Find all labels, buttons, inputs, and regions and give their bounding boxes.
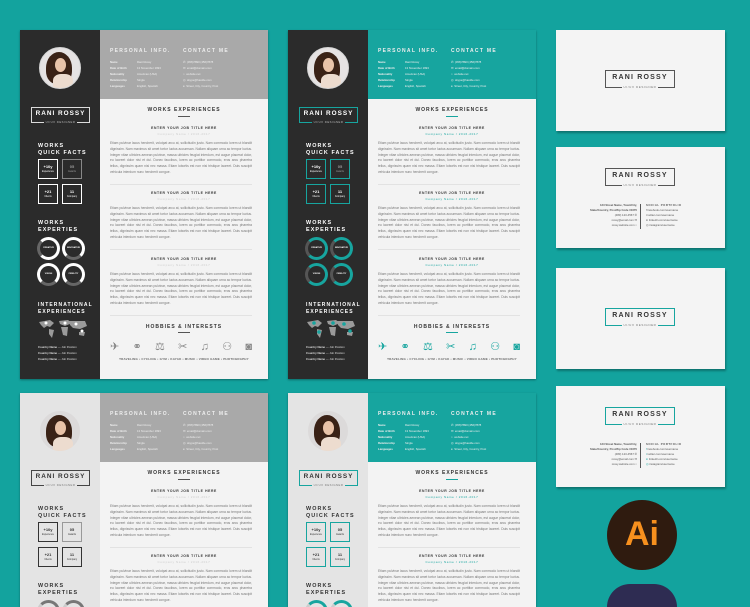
expertise rings: FIDELITY [69,273,78,275]
job entry 3: Company Name / 2016-2017 [426,263,478,267]
heading: works quick facts: WORKS [306,506,332,512]
resume: dark sidebar, teal header (top-right) [288,30,536,379]
card address & contacts: State/Country, Post/Zip Code #1670 [590,447,637,451]
hobby labels: TRAVELING • CYCLING • GYM • KAYAK • MUSIC • VIDEO GAME • PHOTOGRAPHY [387,357,517,361]
quick facts boxes [306,522,350,567]
job entry 2: Company Name / 2016-2017 [426,560,478,564]
quick facts boxes: 05 [70,164,74,169]
contact list: ✆ (456)7890 (456)7878 [183,423,213,427]
hobby icons: ◙ [245,341,252,353]
resume: dark sidebar, teal header (top-right): 13 November 1993 [405,66,429,70]
card name box [605,308,675,326]
hobby icons: ♫ [201,341,209,353]
heading: works experties: EXPERTIES [306,590,346,596]
contact list: ● Street, City, Country, Post [183,447,218,451]
personal info list: Date of Birth [378,66,395,70]
contact list [183,423,218,451]
quick facts boxes: +21 [313,552,319,557]
hobby icons: ⚭ [400,341,410,353]
expertise rings: VISION [45,273,52,275]
card social portfolio [646,442,721,467]
heading: works quick facts: WORKS [306,143,332,149]
resume: dark sidebar, teal header (top-right): Rani Rossy [405,60,419,64]
quick facts boxes: Company [335,558,345,561]
personal info list: Name [110,60,118,64]
quick facts boxes: +10y [43,527,52,532]
resume: dark sidebar, teal header (top-right): American (USA) [405,72,425,76]
job entry 1: Etiam pulvinar lacus hendrerit, volutpat arcu at, sollicitudin justo. Nam commodo lorem ut blandit dignissim. Nam maximus sit amet tortor luctus accumsan. Nullam aliquam urna ac tempor luctus. Integer vitae ultricies aenean pulvinar, massa ultricies feugiat interdum, est augue placerat dolor, eu laoreet dolor nisi et dui. Donec faucibus, lorem ac porttitor commodo, eros arcu pharetra tellus, dignissim quam nisi nec massa. Etiam lobortis est non nisi tristique laoreet. Duis suscipit vehicula interdum nunc hendrerit congue. [110,504,252,537]
contact list: ✉ email@domain.com [451,429,480,433]
personal info list: Date of Birth [110,429,127,433]
heading: works quick facts: QUICK FACTS [306,512,355,518]
card name box [605,407,675,425]
quick facts boxes [38,522,82,567]
resume: light sidebar, teal header (bottom-right) [288,393,536,607]
resume: dark sidebar, gray header (top-left): American (USA) [137,72,157,76]
contact list [183,60,218,88]
job entry 1: Etiam pulvinar lacus hendrerit, volutpat arcu at, sollicitudin justo. Nam commodo lorem ut blandit dignissim. Nam maximus sit amet tortor luctus accumsan. Nullam aliquam urna ac tempor luctus. Integer vitae ultricies aenean pulvinar, massa ultricies feugiat interdum, est augue placerat dolor, eu laoreet dolor nisi et dui. Donec faucibus, lorem ac porttitor commodo, eros arcu pharetra tellus, dignissim quam nisi nec massa. Etiam lobortis est non nisi tristique laoreet. Duis suscipit vehicula interdum nunc hendrerit congue. [378,141,520,174]
expertise rings [306,600,352,607]
personal info list: Relationship [378,441,395,445]
name box: RANI ROSSY [36,110,85,117]
job entry 1: ENTER YOUR JOB TITLE HERE [419,489,485,493]
name box: UI/UX DESIGNER [46,483,75,487]
heading: works quick facts: QUICK FACTS [38,150,87,156]
job entry 2 [378,191,520,239]
contact list: ◎ skype@handle.com [451,78,480,82]
job entry 3: ENTER YOUR JOB TITLE HERE [419,257,485,261]
personal info list: Languages [378,447,393,451]
job entry 3 [378,257,520,305]
quick facts boxes: 05 [70,527,74,532]
name box: RANI ROSSY [304,473,353,480]
card social portfolio [646,203,721,228]
heading: works experiences: WORKS EXPERIENCES [147,107,221,113]
hobby labels: TRAVELING • CYCLING • GYM • KAYAK • MUSIC • VIDEO GAME • PHOTOGRAPHY [119,357,249,361]
name box [299,470,358,486]
icon: Adobe Illustrator badge: Ai [625,515,659,553]
card address & contacts: 123 Street Name, Town/City, [600,203,637,207]
heading: personal info: PERSONAL INFO. [110,411,171,417]
heading: hobbies & interests: HOBBIES & INTERESTS [414,324,490,330]
card social portfolio: f facebook.com/username [646,447,678,451]
hobby icons: ♫ [469,341,477,353]
personal info list: Date of Birth [378,429,395,433]
card social portfolio: in linkedin.com/username [646,218,678,222]
expertise rings: VISION [313,273,320,275]
job entry 3 [110,257,252,305]
heading: international experiences: EXPERIENCES [38,308,86,314]
job entry 1: ENTER YOUR JOB TITLE HERE [151,489,217,493]
card address & contacts: 123 Street Name, Town/City, [600,442,637,446]
heading: works experties: EXPERTIES [306,226,346,232]
resume: light sidebar, teal header (bottom-right): Rani Rossy [405,423,419,427]
card name box: RANI ROSSY [612,411,668,418]
contact list: ◎ skype@handle.com [183,78,212,82]
personal info list: Name [110,423,118,427]
heading: works experties: EXPERTIES [38,590,78,596]
heading: works quick facts [306,506,355,518]
hobby icons: ◙ [513,341,520,353]
resume: dark sidebar, teal header (top-right): Single [405,78,413,82]
hobby icons: ⚖ [155,341,165,353]
contact list: ✉ email@domain.com [183,429,212,433]
resume: dark sidebar, teal header (top-right): English, Spanish [405,84,426,88]
heading: international experiences [306,302,361,314]
job entry 2: Etiam pulvinar lacus hendrerit, volutpat arcu at, sollicitudin justo. Nam commodo lorem ut blandit dignissim. Nam maximus sit amet tortor luctus accumsan. Nullam aliquam urna ac tempor luctus. Integer vitae ultricies aenean pulvinar, massa ultricies feugiat interdum, est augue placerat dolor, eu laoreet dolor nisi et dui. Donec faucibus, lorem ac porttitor commodo, eros arcu pharetra tellus, dignissim quam nisi nec massa. Etiam lobortis est non nisi tristique laoreet. Duis suscipit vehicula interdum nunc hendrerit congue. [110,206,252,239]
card address & contacts [564,203,637,228]
card social portfolio: ◎ instagram/username [646,223,675,227]
heading: works experties [306,220,346,232]
contact list: ◎ skype@handle.com [183,441,212,445]
card name box: RANI ROSSY [612,172,668,179]
resume: light sidebar, gray header (bottom-left) [20,393,268,607]
card name box: UI/UX DESIGNER [624,183,656,187]
job entry 2: ENTER YOUR JOB TITLE HERE [419,191,485,195]
heading: works experties [38,220,78,232]
hobby icons: ✂ [178,341,187,353]
personal info list: Relationship [110,78,127,82]
quick facts boxes: Awards [336,533,344,536]
contact list: ● Street, City, Country, Post [183,84,218,88]
card address & contacts: (480) 123-4567 ✆ [615,452,637,456]
quick facts boxes: Clients [44,195,52,198]
job entry 3: Company Name / 2016-2017 [158,263,210,267]
expertise rings [38,600,84,607]
personal info list: Nationality [378,435,392,439]
personal info list: Languages [110,84,125,88]
hobby icons: ⚇ [490,341,500,353]
job entry 2 [110,554,252,602]
contact list: ✉ email@domain.com [451,66,480,70]
card name box: RANI ROSSY [612,312,668,319]
quick facts boxes: Experience [310,533,322,536]
country list: Country Name — Job Position [306,345,345,349]
hobby icons: ✈ [110,341,119,353]
quick facts boxes: 11 [338,189,342,194]
contact list: ✆ (456)7890 (456)7878 [451,60,481,64]
heading: works experiences: WORKS EXPERIENCES [147,470,221,476]
country list: Country Name — Job Position [306,351,345,355]
card address & contacts: rossy@email.com ✉ [612,457,637,461]
heading: international experiences: INTERNATIONAL [306,302,361,308]
quick facts boxes: +21 [313,189,319,194]
resume: light sidebar, teal header (bottom-right): 13 November 1993 [405,429,429,433]
name box [31,107,90,123]
card address & contacts: (480) 123-4567 ✆ [615,213,637,217]
card name box [605,70,675,88]
heading: international experiences: INTERNATIONAL [38,302,93,308]
quick facts boxes: 05 [338,527,342,532]
personal info list [378,423,395,451]
job entry 1: ENTER YOUR JOB TITLE HERE [419,126,485,130]
job entry 2: Etiam pulvinar lacus hendrerit, volutpat arcu at, sollicitudin justo. Nam commodo lorem ut blandit dignissim. Nam maximus sit amet tortor luctus accumsan. Nullam aliquam urna ac tempor luctus. Integer vitae ultricies aenean pulvinar, massa ultricies feugiat interdum, est augue placerat dolor, eu laoreet dolor nisi et dui. Donec faucibus, lorem ac porttitor commodo, eros arcu pharetra tellus, dignissim quam nisi nec massa. Etiam lobortis est non nisi tristique laoreet. Duis suscipit vehicula interdum nunc hendrerit congue. [110,569,252,602]
job entry 1: Company Name / 2016-2017 [158,495,210,499]
resume: dark sidebar, gray header (top-left) [20,30,268,379]
job entry 1: ENTER YOUR JOB TITLE HERE [151,126,217,130]
card name box: UI/UX DESIGNER [624,422,656,426]
heading: works quick facts: WORKS [38,143,64,149]
resume: dark sidebar, gray header (top-left): Single [137,78,145,82]
job entry 1: Company Name / 2016-2017 [158,132,210,136]
heading: works experties [306,583,346,596]
hobby icons [378,341,520,353]
sidebar profile photo [39,410,81,452]
heading: works quick facts: QUICK FACTS [306,150,355,156]
sidebar profile photo [307,410,349,452]
heading: works experties: WORKS [38,220,64,226]
heading: personal info: PERSONAL INFO. [110,48,171,54]
heading: works experiences: WORKS EXPERIENCES [415,470,489,476]
personal info list: Nationality [110,435,124,439]
job entry 2: Company Name / 2016-2017 [426,197,478,201]
quick facts boxes: Experience [42,170,54,173]
quick facts boxes: +21 [45,552,51,557]
resume: light sidebar, teal header (bottom-right): English, Spanish [405,447,426,451]
card address & contacts [564,442,637,467]
job entry 1 [110,489,252,537]
job entry 2: ENTER YOUR JOB TITLE HERE [151,554,217,558]
heading: works quick facts [38,506,87,518]
quick facts boxes: Experience [310,170,322,173]
quick facts boxes [38,159,82,204]
hobby icons: ⚇ [222,341,232,353]
world map [39,320,87,338]
resume: dark sidebar, gray header (top-left): English, Spanish [137,84,158,88]
quick facts boxes: Awards [68,533,76,536]
heading: contact me: CONTACT ME [183,48,229,54]
heading: hobbies & interests: HOBBIES & INTERESTS [146,324,222,330]
quick facts boxes: Clients [312,195,320,198]
card address & contacts: rossy@email.com ✉ [612,218,637,222]
country list [38,345,77,361]
name box [299,107,358,123]
job entry 1: Etiam pulvinar lacus hendrerit, volutpat arcu at, sollicitudin justo. Nam commodo lorem ut blandit dignissim. Nam maximus sit amet tortor luctus accumsan. Nullam aliquam urna ac tempor luctus. Integer vitae ultricies aenean pulvinar, massa ultricies feugiat interdum, est augue placerat dolor, eu laoreet dolor nisi et dui. Donec faucibus, lorem ac porttitor commodo, eros arcu pharetra tellus, dignissim quam nisi nec massa. Etiam lobortis est non nisi tristique laoreet. Duis suscipit vehicula interdum nunc hendrerit congue. [110,141,252,174]
icon: Adobe Illustrator badge [607,500,677,570]
personal info list: Name [378,423,386,427]
contact list: ○ website.net [183,435,200,439]
job entry 2: ENTER YOUR JOB TITLE HERE [151,191,217,195]
quick facts boxes: +10y [311,164,320,169]
job entry 2 [368,554,536,606]
card name box [605,168,675,186]
job entry 3: ENTER YOUR JOB TITLE HERE [151,257,217,261]
resume: light sidebar, gray header (bottom-left): English, Spanish [137,447,158,451]
resume: light sidebar, gray header (bottom-left): American (USA) [137,435,157,439]
job entry 2: Company Name / 2016-2017 [158,560,210,564]
expertise rings [305,237,353,286]
heading: works quick facts [38,143,87,156]
card social portfolio: in linkedin.com/username [646,457,678,461]
job entry 1 [368,489,536,541]
job entry 2: ENTER YOUR JOB TITLE HERE [419,554,485,558]
heading: works experties: EXPERTIES [38,226,78,232]
contact list [451,60,486,88]
contact list: ● Street, City, Country, Post [451,84,486,88]
expertise rings: FIDELITY [337,273,346,275]
name box: UI/UX DESIGNER [46,120,75,124]
resume: light sidebar, gray header (bottom-left): Rani Rossy [137,423,151,427]
quick facts boxes: 11 [338,552,342,557]
heading: international experiences: EXPERIENCES [306,308,354,314]
card social portfolio: SOCIAL PORTFOLIO [646,442,682,446]
heading: personal info: PERSONAL INFO. [378,411,439,417]
heading: international experiences [38,302,93,314]
personal info list: Languages [110,447,125,451]
contact list [451,423,486,451]
heading: works quick facts: WORKS [38,506,64,512]
card social portfolio: t twitter.com/username [646,213,674,217]
quick facts boxes: 11 [70,189,74,194]
country list [306,345,345,361]
personal info list [378,60,395,88]
heading: works quick facts: QUICK FACTS [38,512,87,518]
expertise rings: INNOVATIVE [67,247,80,249]
job entry 2: Etiam pulvinar lacus hendrerit, volutpat arcu at, sollicitudin justo. Nam commodo lorem ut blandit dignissim. Nam maximus sit amet tortor luctus accumsan. Nullam aliquam urna ac tempor luctus. Integer vitae ultricies aenean pulvinar, massa ultricies feugiat interdum, est augue placerat dolor, eu laoreet dolor nisi et dui. Donec faucibus, lorem ac porttitor commodo, eros arcu pharetra tellus, dignissim quam nisi nec massa. Etiam lobortis est non nisi tristique laoreet. Duis suscipit vehicula interdum nunc hendrerit congue. [378,569,520,602]
contact list: ○ website.net [451,435,468,439]
business card 3: front, teal frame [556,268,725,369]
card name box: RANI ROSSY [612,74,668,81]
personal info list: Nationality [378,72,392,76]
resume: light sidebar, teal header (bottom-right): American (USA) [405,435,425,439]
quick facts boxes: Awards [336,170,344,173]
name box: RANI ROSSY [304,110,353,117]
card social portfolio: f facebook.com/username [646,208,678,212]
resume: dark sidebar, gray header (top-left): 13 November 1993 [137,66,161,70]
contact list: ✉ email@domain.com [183,66,212,70]
resume: light sidebar, gray header (bottom-left): Single [137,441,145,445]
quick facts boxes: Company [67,195,77,198]
quick facts boxes: Company [67,558,77,561]
hobby icons: ⚭ [132,341,142,353]
job entry 3: Etiam pulvinar lacus hendrerit, volutpat arcu at, sollicitudin justo. Nam commodo lorem ut blandit dignissim. Nam maximus sit amet tortor luctus accumsan. Nullam aliquam urna ac tempor luctus. Integer vitae ultricies aenean pulvinar, massa ultricies feugiat interdum, est augue placerat dolor, eu laoreet dolor nisi et dui. Donec faucibus, lorem ac porttitor commodo, eros arcu pharetra tellus, dignissim quam nisi nec massa. Etiam lobortis est non nisi tristique laoreet. Duis suscipit vehicula interdum nunc hendrerit congue. [378,272,520,305]
heading: contact me: CONTACT ME [183,411,229,417]
quick facts boxes: Experience [42,533,54,536]
quick facts boxes: +21 [45,189,51,194]
heading: works experties: WORKS [38,583,64,589]
card address & contacts: rossy.website.com ○ [612,462,637,466]
personal info list: Nationality [110,72,124,76]
icon: second software badge (partially visible) [607,584,677,607]
heading: works experiences: WORKS EXPERIENCES [415,107,489,113]
card social portfolio: t twitter.com/username [646,452,674,456]
business card 2: back, dark frame [556,147,725,248]
resume: dark sidebar, gray header (top-left): Rani Rossy [137,60,151,64]
contact list: ◎ skype@handle.com [451,441,480,445]
country list: Country Name — Job Position [306,357,345,361]
name box: UI/UX DESIGNER [314,120,343,124]
hobby icons: ✂ [446,341,455,353]
contact list: ○ website.net [451,72,468,76]
quick facts boxes: Clients [312,558,320,561]
job entry 1: Company Name / 2016-2017 [426,495,478,499]
contact list: ✆ (456)7890 (456)7878 [451,423,481,427]
card name box: UI/UX DESIGNER [624,85,656,89]
job entry 2: Etiam pulvinar lacus hendrerit, volutpat arcu at, sollicitudin justo. Nam commodo lorem ut blandit dignissim. Nam maximus sit amet tortor luctus accumsan. Nullam aliquam urna ac tempor luctus. Integer vitae ultricies aenean pulvinar, massa ultricies feugiat interdum, est augue placerat dolor, eu laoreet dolor nisi et dui. Donec faucibus, lorem ac porttitor commodo, eros arcu pharetra tellus, dignissim quam nisi nec massa. Etiam lobortis est non nisi tristique laoreet. Duis suscipit vehicula interdum nunc hendrerit congue. [378,206,520,239]
personal info list [110,60,127,88]
business card 4: back, teal frame [556,386,725,487]
hobby icons: ⚖ [423,341,433,353]
hobby icons: ✈ [378,341,387,353]
sidebar profile photo [307,47,349,89]
card social portfolio: SOCIAL PORTFOLIO [646,203,682,207]
hobby icons [110,341,252,353]
job entry 1: Etiam pulvinar lacus hendrerit, volutpat arcu at, sollicitudin justo. Nam commodo lorem ut blandit dignissim. Nam maximus sit amet tortor luctus accumsan. Nullam aliquam urna ac tempor luctus. Integer vitae ultricies aenean pulvinar, massa ultricies feugiat interdum, est augue placerat dolor, eu laoreet dolor nisi et dui. Donec faucibus, lorem ac porttitor commodo, eros arcu pharetra tellus, dignissim quam nisi nec massa. Etiam lobortis est non nisi tristique laoreet. Duis suscipit vehicula interdum nunc hendrerit congue. [378,504,520,537]
heading: works experties [38,583,78,596]
business card 1: front, dark frame [556,30,725,131]
quick facts boxes: Awards [68,170,76,173]
quick facts boxes [306,159,350,204]
personal info list: Name [378,60,386,64]
name box: RANI ROSSY [36,473,85,480]
name box: UI/UX DESIGNER [314,483,343,487]
quick facts boxes: +10y [311,527,320,532]
personal info list: Languages [378,84,393,88]
job entry 2: Company Name / 2016-2017 [158,197,210,201]
quick facts boxes: +10y [43,164,52,169]
personal info list: Date of Birth [110,66,127,70]
expertise rings: CREATIVE [43,247,54,249]
heading: personal info: PERSONAL INFO. [378,48,439,54]
heading: contact me: CONTACT ME [451,411,497,417]
expertise rings [37,237,85,286]
contact list: ✆ (456)7890 (456)7878 [183,60,213,64]
card address & contacts: rossy.website.com ○ [612,223,637,227]
heading: works quick facts [306,143,355,156]
resume: light sidebar, gray header (bottom-left): 13 November 1993 [137,429,161,433]
job entry 1 [110,126,252,174]
country list: Country Name — Job Position [38,345,77,349]
personal info list: Relationship [110,441,127,445]
quick facts boxes: 05 [338,164,342,169]
job entry 1 [378,126,520,174]
contact list: ● Street, City, Country, Post [451,447,486,451]
job entry 2 [110,191,252,239]
resume: light sidebar, teal header (bottom-right): Single [405,441,413,445]
job entry 3: Etiam pulvinar lacus hendrerit, volutpat arcu at, sollicitudin justo. Nam commodo lorem ut blandit dignissim. Nam maximus sit amet tortor luctus accumsan. Nullam aliquam urna ac tempor luctus. Integer vitae ultricies aenean pulvinar, massa ultricies feugiat interdum, est augue placerat dolor, eu laoreet dolor nisi et dui. Donec faucibus, lorem ac porttitor commodo, eros arcu pharetra tellus, dignissim quam nisi nec massa. Etiam lobortis est non nisi tristique laoreet. Duis suscipit vehicula interdum nunc hendrerit congue. [110,272,252,305]
expertise rings: CREATIVE [311,247,322,249]
card address & contacts: State/Country, Post/Zip Code #1670 [590,208,637,212]
personal info list [110,423,127,451]
world map [307,320,355,338]
card name box: UI/UX DESIGNER [624,323,656,327]
sidebar profile photo [39,47,81,89]
quick facts boxes: Company [335,195,345,198]
heading: works experties: WORKS [306,220,332,226]
heading: contact me: CONTACT ME [451,48,497,54]
country list: Country Name — Job Position [38,351,77,355]
heading: works experties: WORKS [306,583,332,589]
job entry 1: Company Name / 2016-2017 [426,132,478,136]
country list: Country Name — Job Position [38,357,77,361]
expertise rings: INNOVATIVE [335,247,348,249]
personal info list: Relationship [378,78,395,82]
quick facts boxes: Clients [44,558,52,561]
name box [31,470,90,486]
contact list: ○ website.net [183,72,200,76]
card social portfolio: ◎ instagram/username [646,462,675,466]
quick facts boxes: 11 [70,552,74,557]
